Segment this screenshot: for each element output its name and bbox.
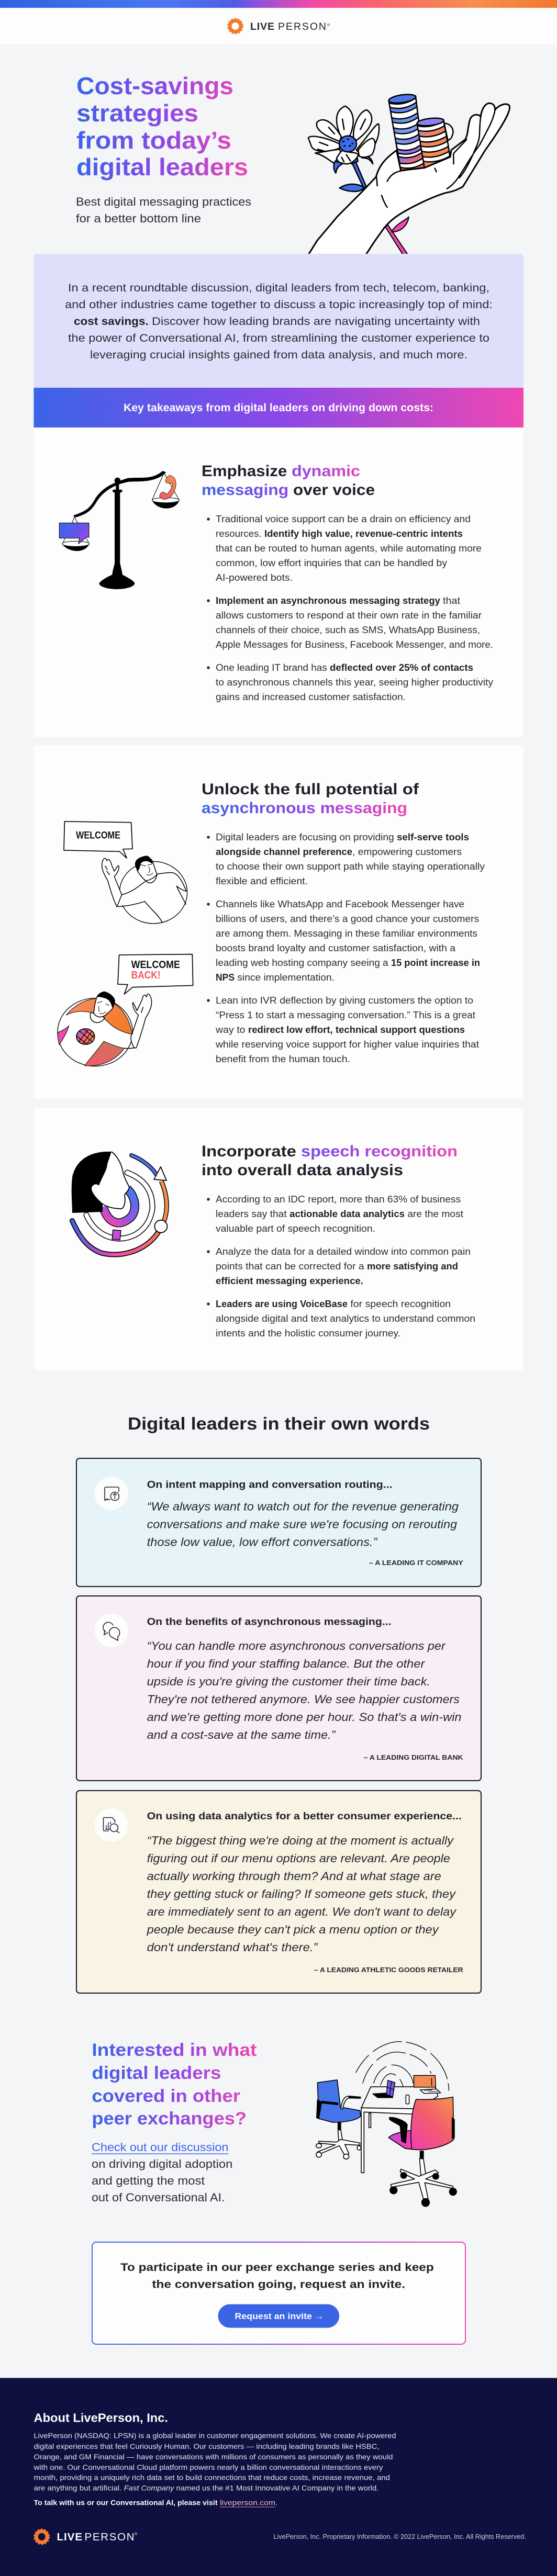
bullet list: actionable data analytics (289, 1209, 405, 1219)
bullet list: alongside digital and text analytics to understand common (216, 1313, 475, 1324)
bullet list: while reserving voice support for higher value inquiries that (215, 1039, 479, 1050)
panel: unlock asynchronous messaging (34, 746, 523, 1099)
banner: key takeaways (34, 388, 523, 428)
bullet list: Lean into IVR deflection by giving customers the option to (216, 995, 473, 1006)
icon: man outline (102, 856, 187, 924)
quote: upside is you're giving the customer their time back. (147, 1675, 430, 1688)
footer logo (35, 2529, 138, 2544)
blue chair (316, 2080, 361, 2159)
card title: On intent mapping and conversation routing... (147, 1479, 393, 1491)
bullet list: redirect low effort, technical support questions (248, 1025, 465, 1035)
quote: actually working through them? And at what stage are (147, 1870, 441, 1883)
speech bubble: welcome back: BACK! (131, 970, 161, 981)
bullet list: boosts brand loyalty and customer satisfaction, with a (216, 943, 456, 953)
bullet list: allows customers to respond at their own rate in the familiar (216, 610, 482, 621)
bullet list: valuable part of speech recognition. (216, 1223, 375, 1234)
icon: LivePerson sun logo (228, 19, 243, 33)
quote: and a cost-save at the same time.” (147, 1728, 336, 1741)
card title: On the benefits of asynchronous messaging... (147, 1616, 392, 1627)
bullet list: Traditional voice support can be a drain on efficiency and (216, 514, 471, 524)
bullet list: that can be routed to human agents, while automating more (216, 543, 482, 554)
footer contact line: To talk with us or our Conversational AI, please visit (34, 2499, 219, 2507)
bullet list: intents and the holistic consumer journey. (216, 1328, 400, 1338)
quote: hour if you find your staffing balance. But the other (147, 1657, 426, 1670)
heading: Incorporate (202, 1143, 301, 1160)
quote: “The biggest thing we're doing at the moment is actually (147, 1834, 454, 1847)
outer rings (72, 1221, 159, 1255)
heading: peer exchanges: Interested in what (92, 2040, 257, 2060)
speech bubble: welcome (64, 822, 132, 858)
quote: “You can handle more asynchronous conversations per (147, 1639, 446, 1652)
bullet list: billions of users, and there’s a good chance your customers (216, 914, 479, 924)
illustration: waving man and welcome bubble (64, 822, 187, 924)
bullet list: since implementation. (235, 972, 335, 983)
attribution: – A LEADING IT COMPANY (369, 1559, 463, 1567)
heading: peer exchanges: peer exchanges? (92, 2109, 247, 2129)
bullet list: are the most (405, 1209, 463, 1219)
icon: hand (307, 103, 510, 256)
icon: pink stem and leaf (385, 217, 409, 256)
footer logo: ® (135, 2532, 138, 2536)
icon: man in colored circle (58, 992, 152, 1066)
intro paragraph: Discover how leading brands are navigating uncertainty with (152, 315, 480, 328)
heading: Emphasize (202, 463, 292, 480)
intro paragraph: the power of Conversational AI, from streamlining the customer experience to (68, 332, 489, 344)
bullet list: channels of their choice, such as SMS, WhatsApp Business, (216, 625, 480, 635)
text: discussion link and description: on driving digital adoption (92, 2157, 232, 2170)
quote: they getting stuck or failing? If someone gets stuck, they (147, 1887, 456, 1900)
footer contact line: . (275, 2499, 277, 2507)
bullet list: One leading IT brand has (216, 662, 330, 673)
callout text (120, 2261, 434, 2291)
intro paragraph: leveraging crucial insights gained from data analysis, and much more. (90, 348, 467, 361)
top gradient bar (0, 0, 557, 8)
footer paragraph: Fast Company (124, 2484, 175, 2492)
quote card: data analytics (76, 1791, 481, 1993)
bullet list: Apple Messages for Business, Facebook Messenger, and more. (216, 639, 493, 650)
icon: document with magnifier (95, 1808, 128, 1842)
bullet list: benefit from the human touch. (216, 1054, 350, 1064)
bullet list: Identify high value, revenue-centric intents (264, 528, 463, 539)
copyright: LivePerson, Inc. Proprietary Information. © 2022 LivePerson, Inc. All Rights Reserved. (273, 2533, 526, 2540)
footer paragraph: named us the #1 Most Innovative AI Company in the world. (174, 2484, 378, 2492)
hero title: from today’s (76, 127, 231, 154)
bullet list: Analyze the data for a detailed window into common pain (216, 1246, 471, 1257)
button (218, 2304, 339, 2328)
icon: short coin stack (417, 117, 450, 169)
speech bubble: welcome back: WELCOME (131, 959, 180, 971)
callout text: To participate in our peer exchange series and keep (120, 2261, 434, 2274)
quote (147, 1639, 462, 1741)
pink chair (388, 2097, 456, 2207)
icon: tall coin stack (388, 93, 425, 171)
text: discussion link and description (92, 2141, 232, 2204)
footer contact line (34, 2499, 277, 2507)
heading: Unlock the full potential of (202, 781, 419, 798)
woman head (72, 1152, 112, 1213)
header with logo (0, 8, 557, 44)
quote: don't understand what's there.” (147, 1941, 318, 1954)
bullet list: According to an IDC report, more than 63% of business (216, 1194, 461, 1205)
quote: people because they can't pick a menu option or they (147, 1923, 440, 1936)
bullet list: 15 point increase in (391, 958, 480, 968)
quote: figuring out if our menu options are relevant. Are people (147, 1852, 450, 1865)
bullet list: deflected over 25% of contacts (330, 662, 473, 673)
quote (147, 1834, 457, 1954)
quote card: asynchronous messaging (76, 1596, 481, 1781)
bullet list: common, low effort inquiries that can be handled by (216, 558, 447, 568)
section heading: digital leaders in their own words: Digital leaders in their own words (128, 1414, 430, 1433)
illustration: returning customer with welcome back bubble (58, 954, 193, 1066)
bullet list: Implement an asynchronous messaging strategy (216, 595, 443, 606)
bullet list: leading web hosting company seeing a (216, 958, 391, 968)
heading: peer exchanges: covered in other (92, 2086, 240, 2106)
scale post and beam (73, 471, 166, 589)
card title: On using data analytics for a better consumer experience... (147, 1810, 462, 1822)
speech bubble: welcome back (118, 954, 193, 994)
panel: intro (34, 254, 523, 388)
illustration: woman with sound rings (72, 1152, 167, 1255)
footer contact line: liveperson.com (220, 2499, 275, 2507)
panel: unlock asynchronous messaging: asynchronous messaging (202, 800, 407, 817)
bullet list (207, 514, 493, 702)
footer heading: About LivePerson, Inc. (34, 2411, 168, 2425)
logo wordmark: ® (327, 23, 330, 27)
text: discussion link and description: out of Conversational AI. (92, 2191, 225, 2204)
footer paragraph: Orange, and GM Financial — have conversations with millions of consumers as personally as they would (34, 2453, 393, 2461)
quote (147, 1500, 459, 1549)
intro paragraph: In a recent roundtable discussion, digital leaders from tech, telecom, banking, (68, 282, 489, 294)
footer paragraph: LivePerson (NASDAQ: LPSN) is a global leader in customer engagement solutions. We create AI-powered (34, 2432, 396, 2440)
callout: request an invite (92, 2242, 465, 2344)
icon: thumb behind coins (444, 123, 453, 140)
bullet list: NPS (216, 972, 235, 983)
bullet list (207, 832, 485, 1064)
quote: “We always want to watch out for the revenue generating (147, 1500, 459, 1513)
right pan with phone (152, 473, 180, 509)
quote: and we're getting more done per hour. So that's a win-win (147, 1711, 462, 1724)
button: Request an invite → (235, 2311, 324, 2321)
bullet list: gains and increased customer satisfaction. (216, 692, 406, 702)
heading: dynamic (292, 463, 360, 480)
inner gradient ring (103, 1189, 135, 1223)
hero title: strategies (76, 99, 198, 127)
bullet list: to asynchronous channels this year, seeing higher productivity (216, 677, 493, 688)
panel: emphasize dynamic messaging (34, 428, 523, 737)
bullet list: Leaders are using VoiceBase (216, 1299, 348, 1309)
bullet list: more satisfying and (367, 1261, 458, 1272)
bullet list: points that can be corrected for a (216, 1261, 367, 1272)
bullet list: AI-powered bots. (216, 572, 293, 583)
bullet list: Channels like WhatsApp and Facebook Messenger have (216, 899, 464, 909)
left pan with chat bubble (59, 517, 90, 551)
bullet list: flexible and efficient. (216, 876, 308, 886)
logo wordmark: LIVE (250, 21, 274, 32)
illustration: hand holding coins and flower (307, 93, 510, 256)
quote: They're not tethered anymore. We see happier customers (147, 1693, 460, 1706)
bullet list: way to (215, 1025, 248, 1035)
quote: those low value, low effort conversations.” (147, 1535, 378, 1549)
attribution: – A LEADING DIGITAL BANK (364, 1753, 463, 1761)
callout text: the conversation going, request an invite. (152, 2278, 405, 2291)
text: discussion link and description: Check out our discussion (92, 2141, 228, 2154)
footer logo: LIVE (57, 2531, 82, 2543)
footer logo: PERSON (85, 2531, 134, 2543)
intro paragraph: cost savings. (74, 315, 152, 328)
bullet list (207, 1194, 475, 1338)
bullet list: “Press 1 to start a messaging conversation.” This is a great (216, 1010, 475, 1020)
bullet list: Digital leaders are focusing on providing (216, 832, 397, 842)
bullet list: leaders say that (216, 1209, 289, 1219)
dashed signal arcs (356, 2042, 449, 2093)
bullet list: efficient messaging experience. (216, 1276, 363, 1286)
footer paragraph (33, 2432, 396, 2492)
desk items (373, 2075, 441, 2104)
heading: peer exchanges (92, 2040, 257, 2129)
bullet list: alongside channel preference (216, 847, 352, 857)
hero title: digital leaders (76, 153, 248, 181)
panel: speech recognition (34, 1108, 523, 1370)
footer paragraph: digital experiences that feel Curiously Human. Our customers — including leading brands like HSBC, (34, 2442, 379, 2450)
desk (361, 2087, 438, 2173)
bullet list: resources. (216, 528, 264, 539)
intro paragraph (65, 282, 493, 361)
panel: emphasize dynamic messaging: over voice (293, 481, 375, 499)
footer paragraph: with one. Our Conversational Cloud platform powers nearly a billion conversational interactions every (33, 2463, 383, 2471)
illustration: balance scale (59, 471, 180, 589)
bullet list: , empowering customers (352, 847, 462, 857)
panel: speech recognition: into overall data analysis (202, 1162, 403, 1179)
footer (0, 2378, 557, 2576)
icon: chat upload (95, 1477, 128, 1510)
hero title: Cost-savings (76, 72, 233, 99)
panel: emphasize dynamic messaging: messaging (202, 481, 293, 499)
bullet list: self-serve tools (397, 832, 469, 842)
bullet list: are among them. Messaging in these familiar environments (216, 928, 477, 939)
footer paragraph: month, providing a uniquely rich data set to build connections that reduce costs, increase revenue, and (34, 2473, 390, 2482)
icon: flower (308, 106, 379, 192)
bullet list: for speech recognition (348, 1299, 451, 1309)
logo wordmark: PERSON (278, 21, 326, 32)
icon: two chat bubbles (95, 1614, 128, 1647)
hero subtitle: for a better bottom line (76, 212, 201, 225)
hero title (76, 72, 248, 181)
hero subtitle (76, 195, 251, 225)
bullet list: that (443, 595, 460, 606)
illustration: desk with two chairs (316, 2042, 456, 2207)
text: discussion link and description: and getting the most (92, 2174, 205, 2187)
quote card: intent mapping (76, 1458, 481, 1587)
banner: key takeaways: Key takeaways from digital leaders on driving down costs: (124, 402, 433, 414)
heading: peer exchanges: digital leaders (92, 2063, 221, 2083)
quote: conversations and make sure we're focusing on rerouting (147, 1517, 458, 1531)
heading: speech recognition (301, 1143, 458, 1160)
attribution: – A LEADING ATHLETIC GOODS RETAILER (314, 1966, 463, 1974)
bullet list: to choose their own support path while staying operationally (216, 861, 485, 872)
middle white ring (86, 1173, 152, 1239)
speech bubble: welcome: WELCOME (76, 830, 120, 841)
quote: are immediately sent to an agent. We don't want to delay (147, 1905, 457, 1918)
intro paragraph: and other industries came together to discuss a topic increasingly top of mind: (65, 298, 493, 311)
hero subtitle: Best digital messaging practices (76, 195, 251, 208)
footer paragraph: are anything but artificial. (34, 2484, 124, 2492)
